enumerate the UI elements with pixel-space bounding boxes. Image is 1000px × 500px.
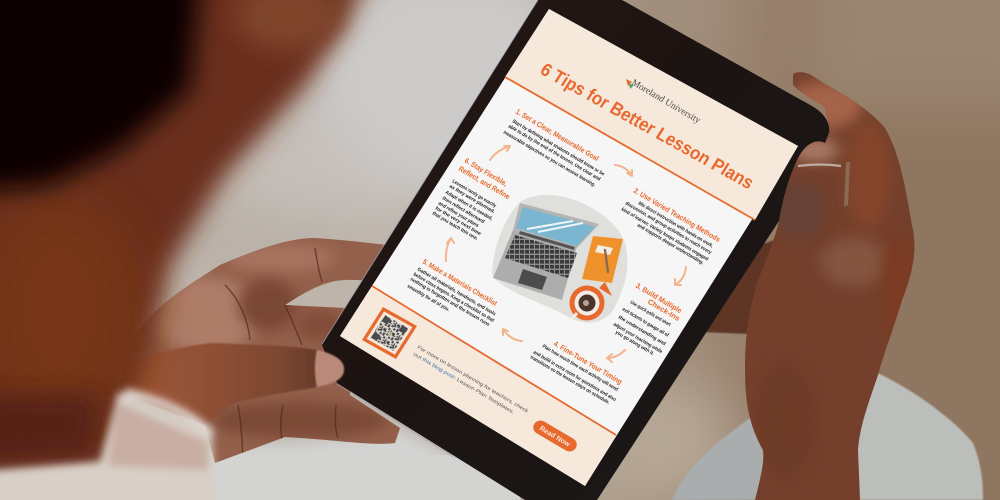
thumbnail xyxy=(315,350,344,387)
tip 6: Reflect, and Refine xyxy=(457,164,512,201)
tip 6: then reflect afterward xyxy=(441,196,486,225)
footer text: For more on lesson planning for teachers, check xyxy=(416,345,530,415)
tip 3: Use quick polls and short xyxy=(629,300,672,328)
head xyxy=(0,0,390,480)
right hand xyxy=(745,72,914,500)
logo: Moreland University xyxy=(629,78,702,126)
Read Now button: Read Now xyxy=(538,425,571,449)
footer rule xyxy=(372,286,616,435)
tip 4: Plan how much time each activity will need xyxy=(541,344,619,393)
left thumb xyxy=(125,343,344,425)
tip 6: that you teach this one. xyxy=(431,211,479,242)
tip 6: Adapt when it is needed, xyxy=(444,190,494,222)
cycle arrows xyxy=(446,146,686,362)
tip 5 xyxy=(406,257,499,328)
tablet screen xyxy=(340,9,798,486)
tip 4: transitions so the lesson stays on schedule. xyxy=(529,355,611,406)
tip 3 xyxy=(612,281,684,357)
tip 6 xyxy=(431,156,512,242)
tip 6: 6. Stay Flexible, xyxy=(463,156,509,188)
header rule xyxy=(505,77,755,220)
notebook xyxy=(582,236,623,296)
tip 2: Mix direct instruction with hands-on work, xyxy=(637,201,715,250)
header band xyxy=(505,9,798,220)
blurred trousers xyxy=(200,428,520,500)
footer text xyxy=(412,345,530,416)
tip 5: 5. Make a Materials Checklist xyxy=(421,257,499,308)
tip 6: Lessons rarely go exactly xyxy=(451,179,497,209)
tip 2: discussion, and group activities to reach every xyxy=(624,201,713,256)
tip 2: kind of learner. Variety keeps students engaged xyxy=(620,207,709,262)
tip 1: measurable objectives so you can assess learning. xyxy=(502,130,597,189)
thumbnail highlight xyxy=(798,164,841,166)
coffee cup xyxy=(570,286,604,320)
tip 3: you go along with it. xyxy=(614,330,656,357)
illustration: laptop, notebook, coffee xyxy=(492,195,627,323)
page background xyxy=(340,9,798,486)
title: 6 Tips for Better Lesson Plans xyxy=(537,59,758,193)
tip 6: for the very next time xyxy=(434,206,482,237)
laptop xyxy=(493,203,599,300)
tip 3: 3. Build Multiple xyxy=(634,281,684,315)
Read Now button xyxy=(531,418,579,454)
tablet edge highlight xyxy=(322,0,538,458)
tip 5: nothing is forgotten and the lesson runs xyxy=(409,277,491,328)
shirt xyxy=(0,392,215,500)
tip 2: and supports deeper understanding. xyxy=(636,223,705,266)
tip 6: and refine your plans xyxy=(437,201,480,229)
knee xyxy=(672,372,983,500)
tip 2: 2. Use Varied Teaching Methods xyxy=(632,186,722,244)
tip 5: smoothly for all of you. xyxy=(406,284,451,313)
tip 6: as they were planned. xyxy=(448,184,496,215)
tip 3: Check-Ins xyxy=(646,297,682,323)
QR code xyxy=(364,309,415,357)
tip 5: Gather all materials, handouts, and tools xyxy=(416,267,497,317)
footer band xyxy=(340,286,616,486)
gap between thumb and finger xyxy=(844,162,850,207)
footer text: out this blog post : Lesson Plan Templates. xyxy=(412,352,515,416)
tip 5: before class begins. Keep a checklist so that xyxy=(412,272,496,324)
tip 4: and build in extra room for questions and also xyxy=(532,350,617,403)
tablet body xyxy=(322,0,829,500)
tip 3: the understanding and xyxy=(617,315,667,347)
fingers behind tablet right xyxy=(700,240,775,335)
tip 1: Start by defining what students should know or be xyxy=(511,119,606,178)
tip 1: able to do by the end of the lesson. Use clear and xyxy=(507,124,602,182)
tip 3: adjust your teaching while xyxy=(612,322,664,355)
left hand fingers behind tablet xyxy=(124,238,400,463)
tip 3: exit tickets to gauge all of xyxy=(621,307,670,339)
tip 1: 1. Set a Clear, Measurable Goal xyxy=(514,107,601,163)
tip 4: 4. Fine-Tune Your Timing xyxy=(552,339,624,386)
